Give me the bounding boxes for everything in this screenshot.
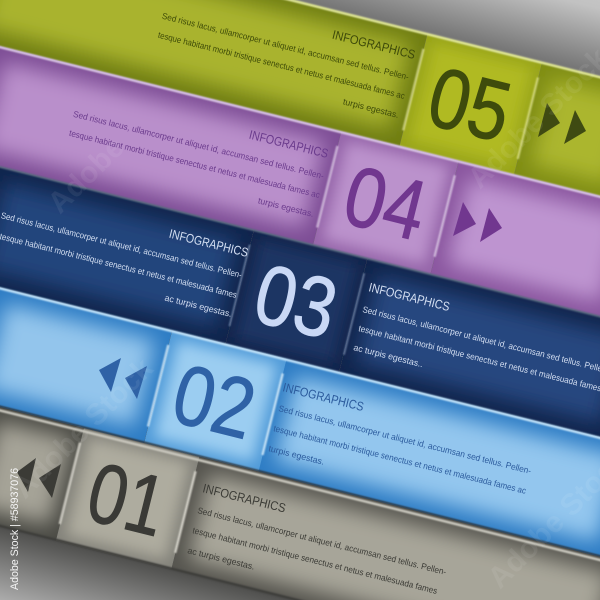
text block 02: tesque habitant morbi tristique senectus et netus et malesuada fames ac [273, 423, 528, 496]
text block 05: INFOGRAPHICS [331, 28, 417, 62]
text block 03 left: ac turpis egestas. [164, 293, 233, 319]
text block 02: Sed risus lacus, ullamcorper ut aliquet id, accumsan sed tellus. Pellen- [278, 403, 532, 476]
text block 01: tesque habitant morbi tristique senectus et netus et malesuada fames [192, 525, 439, 596]
number box 05: 05 [419, 49, 520, 161]
text block 03 left: Sed risus lacus, ullamcorper ut aliquet id, accumsan sed tellus. Pellen- [0, 210, 243, 280]
text block 05: turpis egestas. [342, 96, 400, 120]
text block 02: INFOGRAPHICS [281, 380, 365, 414]
text block 02: turpis egestas. [268, 443, 325, 467]
text block 03 left: INFOGRAPHICS [168, 227, 250, 260]
text block 03 right [353, 280, 600, 394]
arrows 04 [453, 202, 502, 242]
text block 02 [268, 380, 532, 496]
text block 05: tesque habitant morbi tristique senectus et netus et malesuada fames ac [157, 30, 406, 101]
text block 01: Sed risus lacus, ullamcorper ut aliquet id, accumsan sed tellus. Pellen- [197, 505, 447, 577]
text block 05 [157, 11, 417, 120]
number box 04: 04 [335, 148, 435, 259]
text block 04 [68, 109, 330, 219]
panel: band 04 [0, 44, 600, 319]
text block 01: INFOGRAPHICS [201, 481, 287, 515]
text block 01 [187, 481, 447, 596]
text block 04: Sed risus lacus, ullamcorper ut aliquet id, accumsan sed tellus. Pellen- [72, 109, 325, 181]
text block 04: tesque habitant morbi tristique senectus et netus et malesuada fames ac [68, 128, 321, 200]
number box 05 [398, 33, 543, 175]
text block 04: turpis egestas. [257, 195, 315, 219]
panel: band 02 [0, 286, 600, 559]
number box 04 [312, 131, 460, 275]
text block 05: Sed risus lacus, ullamcorper ut aliquet id, accumsan sed tellus. Pellen- [161, 11, 410, 82]
number box 02: 02 [164, 346, 264, 458]
number box 03: 03 [245, 246, 346, 358]
number box 01: 01 [78, 445, 175, 555]
text block 03 right: INFOGRAPHICS [367, 280, 451, 314]
watermark: Adobe [42, 131, 131, 220]
panel: band 03 [0, 165, 600, 440]
text block 01: ac turpis egestas. [187, 545, 256, 572]
text block 03 left: tesque habitant morbi tristique senectus et netus et malesuada fames [0, 231, 238, 300]
text block 03 right: ac turpis egestas.. [353, 342, 424, 369]
arrows 02 [99, 358, 147, 399]
number box 01 [54, 428, 200, 570]
number box 03 [224, 230, 369, 372]
panel: band 05 [0, 0, 600, 201]
text block 04: INFOGRAPHICS [248, 128, 330, 161]
watermark: Adobe Stock [7, 352, 160, 505]
arrows 01 [17, 458, 61, 498]
arrows 05 [538, 103, 586, 144]
credit: vertical stock label: Adobe Stock | #58937076 [9, 468, 21, 590]
number box 02 [143, 330, 288, 472]
text block 03 left [0, 210, 250, 319]
panel: band 01 [0, 404, 600, 600]
